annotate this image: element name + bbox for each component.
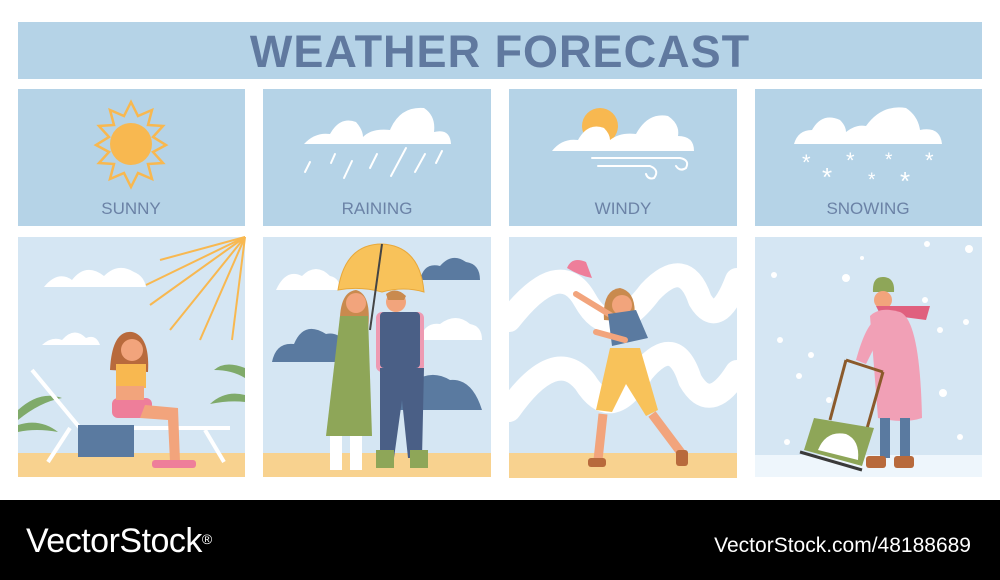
icon: snow cloud: * bbox=[846, 148, 855, 173]
woman bbox=[110, 332, 196, 468]
panel: raining icon bbox=[263, 89, 491, 226]
palms bbox=[18, 396, 62, 432]
panel: raining icon: RAINING bbox=[342, 199, 412, 218]
icon: snow cloud: * bbox=[868, 170, 876, 191]
icon: snow cloud bbox=[794, 107, 942, 196]
icon: snow cloud: * bbox=[900, 166, 910, 196]
panel: windy icon: WINDY bbox=[595, 199, 651, 218]
footer watermark bar bbox=[0, 500, 1000, 580]
icon: snow cloud: * bbox=[885, 150, 893, 171]
icon: snow cloud: * bbox=[802, 150, 811, 175]
person with shovel bbox=[800, 277, 930, 470]
clouds bbox=[276, 269, 340, 290]
footer watermark bar: VectorStock® bbox=[26, 522, 213, 560]
panel: snowing icon: SNOWING bbox=[826, 199, 910, 218]
panel: sunny icon: SUNNY bbox=[101, 199, 161, 218]
title bar bbox=[18, 22, 982, 79]
icon: sun behind cloud with wind bbox=[552, 108, 694, 178]
sun rays bbox=[146, 237, 245, 340]
panel: sunny icon bbox=[18, 89, 245, 226]
panel: sunny scene bbox=[18, 237, 245, 477]
footer watermark bar: VectorStock.com/48188689 bbox=[714, 534, 971, 557]
icon: sun bbox=[96, 102, 166, 187]
panel: snowing icon bbox=[755, 89, 982, 226]
icon: rain cloud bbox=[304, 108, 451, 178]
panel: windy icon bbox=[509, 89, 737, 226]
title bar: WEATHER FORECAST bbox=[250, 26, 750, 77]
girl bbox=[576, 288, 688, 467]
couple bbox=[326, 290, 428, 470]
panel: snowing scene bbox=[755, 237, 982, 477]
panel: windy scene bbox=[509, 237, 737, 478]
hat bbox=[567, 260, 592, 278]
clouds bbox=[44, 268, 146, 287]
icon: snow cloud: * bbox=[925, 148, 934, 173]
lounger bbox=[32, 370, 230, 462]
icon: snow cloud: * bbox=[822, 162, 832, 192]
umbrella bbox=[338, 244, 424, 330]
snowflakes bbox=[771, 241, 973, 445]
panel: raining scene bbox=[263, 237, 491, 477]
wind swirls bbox=[509, 275, 737, 410]
